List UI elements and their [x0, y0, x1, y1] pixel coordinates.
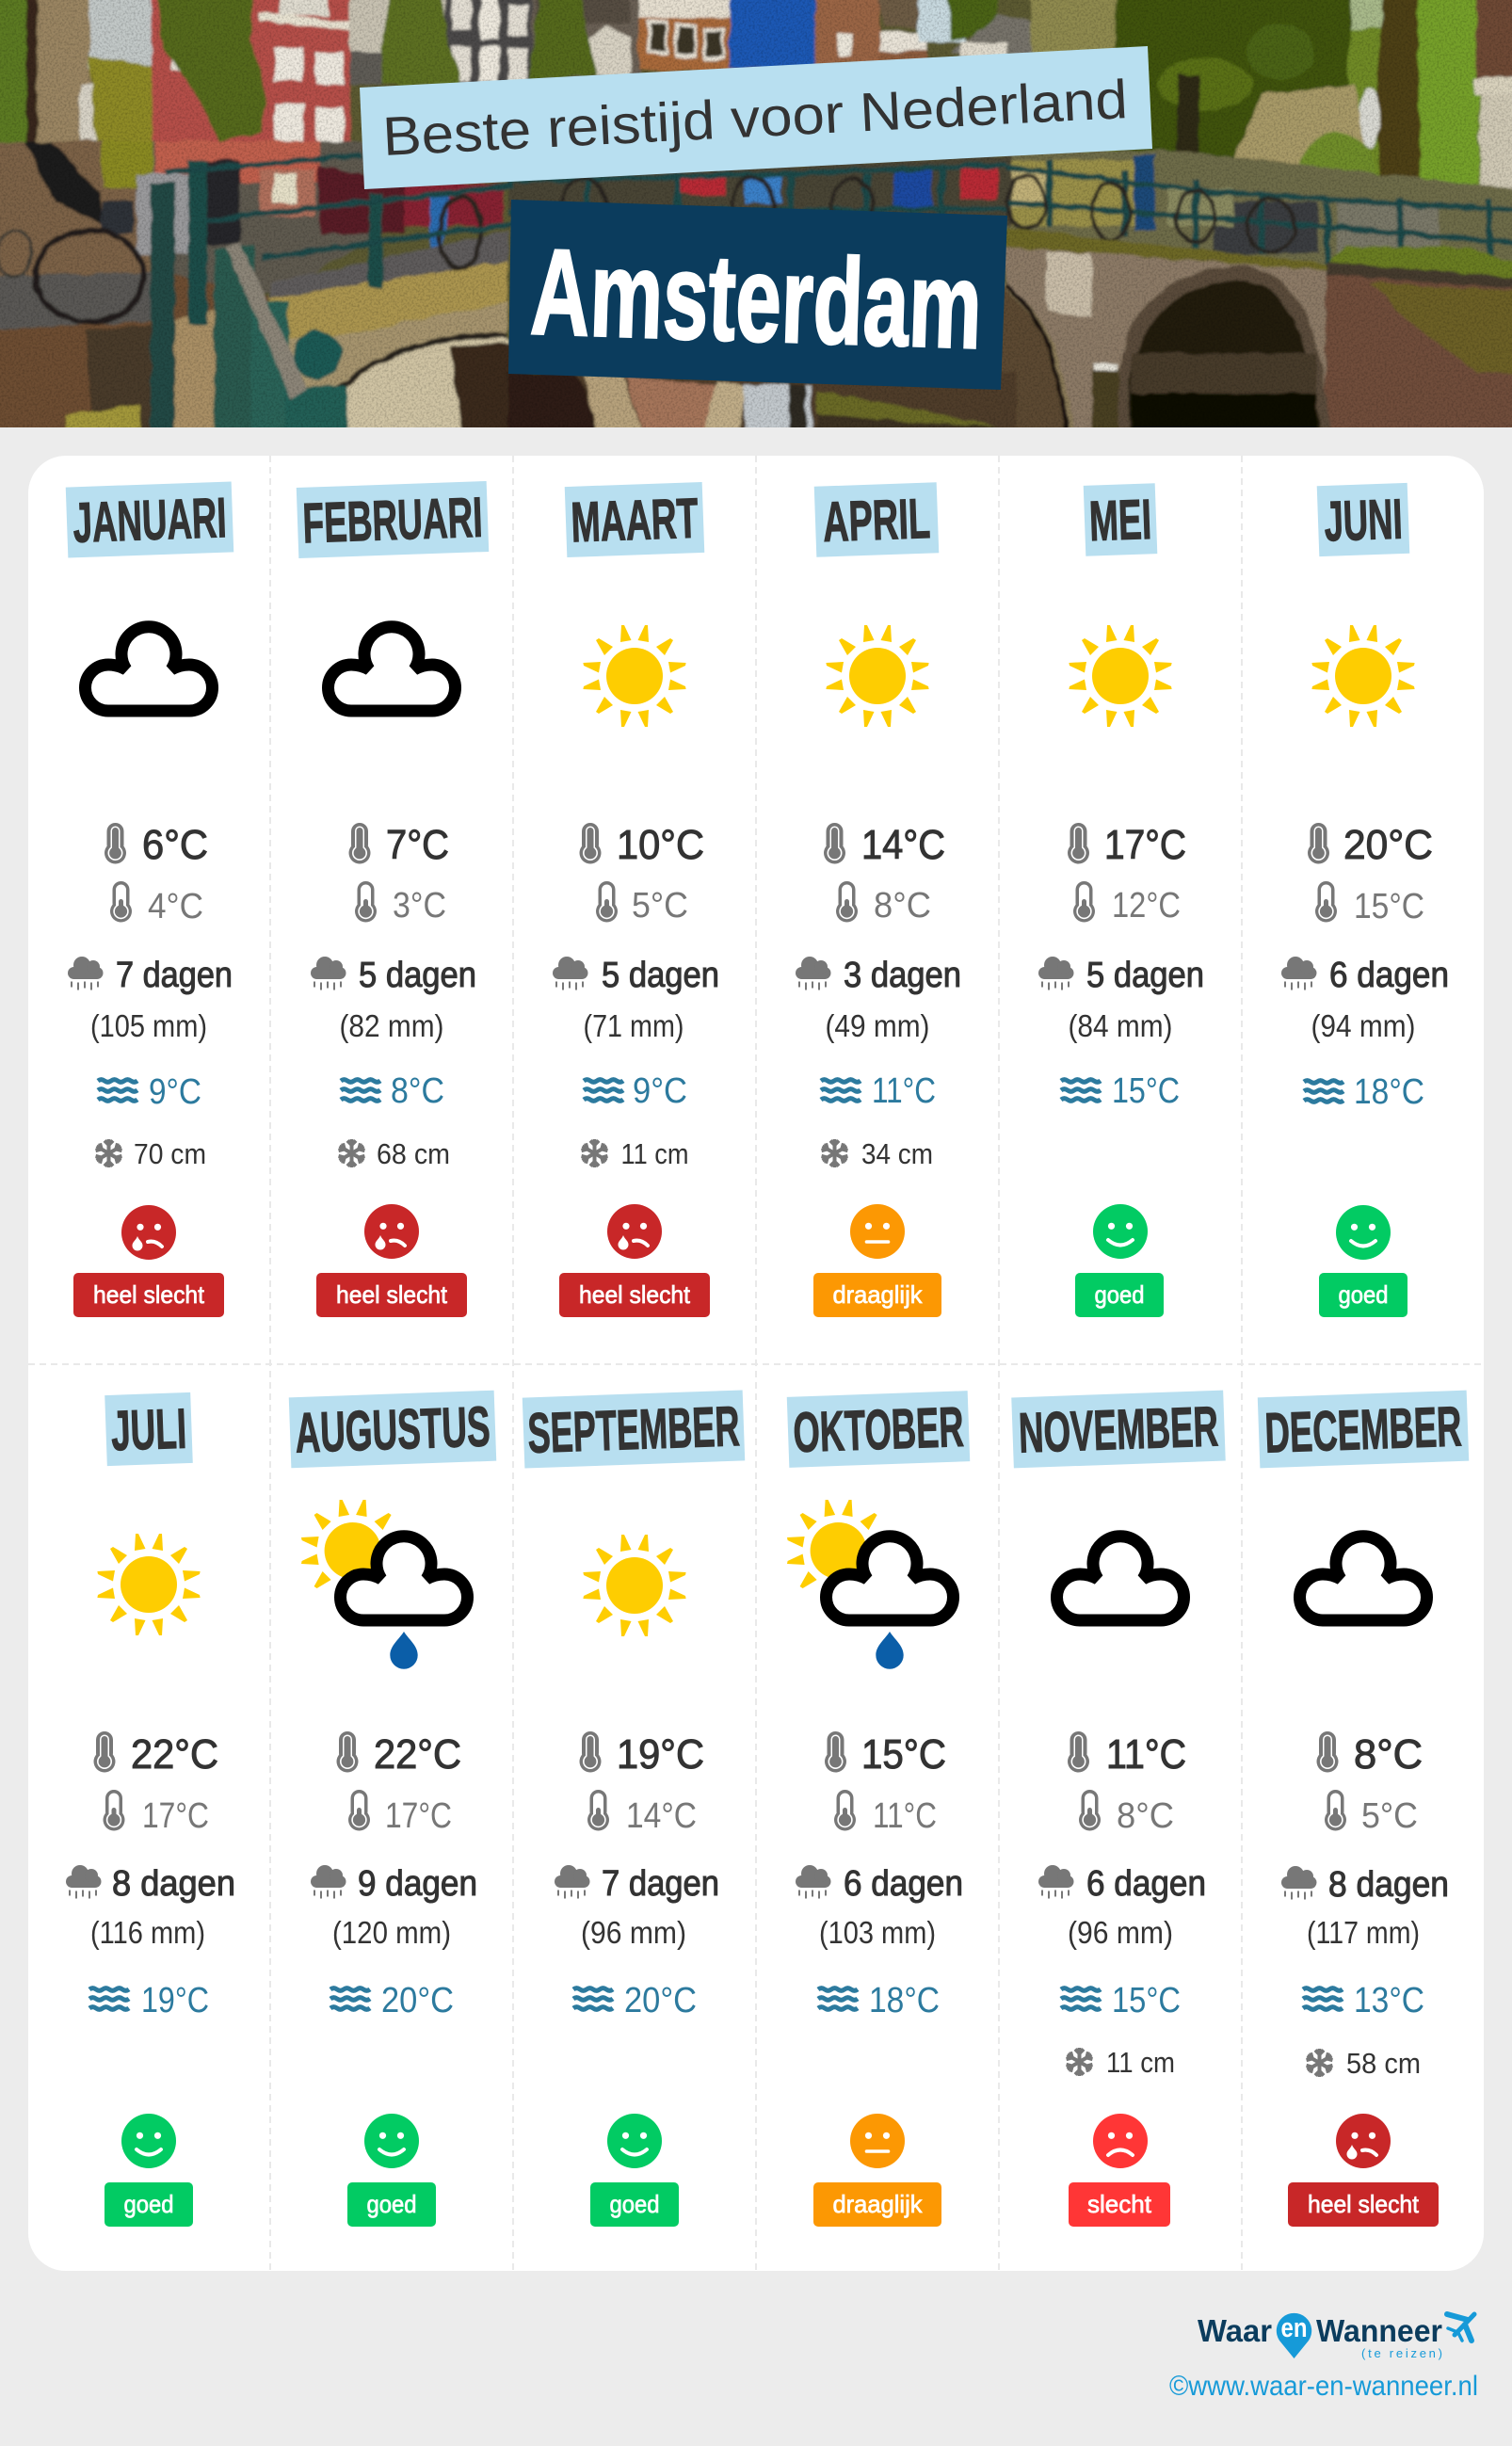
icon: water	[98, 1080, 137, 1101]
logo: Waar en Wanneer: Wanneer	[1316, 2313, 1442, 2348]
max temperature: 8°C	[1354, 1731, 1423, 1778]
month label	[1084, 483, 1157, 556]
max temperature: 15°C	[861, 1731, 946, 1778]
rating badge: goed	[1094, 1280, 1145, 1309]
min temperature: 12°C	[1112, 886, 1181, 925]
icon: snow	[94, 1139, 123, 1167]
rating badge	[347, 2182, 436, 2227]
icon: rain	[796, 1865, 830, 1898]
icon: min thermometer	[1079, 1790, 1101, 1830]
rating badge: heel slecht	[579, 1280, 691, 1309]
max temperature: 22°C	[374, 1731, 461, 1778]
rating badge: draaglijk	[832, 2190, 923, 2218]
icon: rating face	[1093, 1204, 1148, 1259]
rainfall: (82 mm)	[339, 1008, 444, 1043]
icon: cloud	[1056, 1537, 1184, 1620]
panel: april	[796, 482, 961, 1317]
rating badge	[1075, 1273, 1164, 1317]
icon: water	[330, 1988, 370, 2009]
icon: max thermometer	[94, 1731, 115, 1772]
month label: SEPTEMBER	[526, 1394, 741, 1465]
icon: max thermometer	[1068, 823, 1089, 864]
title banner	[508, 200, 1007, 390]
photo grain	[0, 0, 1512, 427]
icon: max thermometer	[580, 1731, 601, 1772]
month label	[523, 1390, 745, 1469]
month label	[105, 1392, 193, 1466]
rain days: 6 dagen	[1086, 1864, 1206, 1904]
month label	[1011, 1391, 1226, 1468]
rating badge	[813, 1273, 941, 1317]
panel: month grid card	[28, 456, 1484, 2271]
icon: sun	[97, 1534, 201, 1635]
subtitle text: Beste reistijd voor Nederland	[381, 69, 1129, 168]
icon: min thermometer	[348, 1790, 370, 1830]
max temperature: 6°C	[142, 822, 208, 868]
icon: min thermometer	[836, 881, 858, 923]
snow depth: 58 cm	[1346, 2047, 1421, 2080]
max temperature: 17°C	[1104, 822, 1186, 868]
water temperature: 18°C	[869, 1981, 940, 2020]
max temperature: 20°C	[1343, 822, 1433, 868]
water temperature: 9°C	[149, 1072, 201, 1112]
rating badge	[105, 2182, 193, 2227]
rating badge: slecht	[1087, 2190, 1152, 2218]
month label	[289, 1391, 496, 1468]
icon: max thermometer	[825, 1731, 846, 1772]
rainfall: (71 mm)	[584, 1008, 684, 1043]
rating badge: heel slecht	[93, 1280, 205, 1309]
icon: rain	[1281, 957, 1316, 990]
icon: rating face	[607, 1204, 662, 1259]
icon: cloud	[85, 627, 213, 711]
panel: januari	[66, 481, 233, 1317]
icon: rating face	[1093, 2114, 1148, 2168]
panel: juni	[1281, 483, 1449, 1317]
icon: water	[818, 1988, 858, 2009]
icon: airplane	[1447, 2314, 1474, 2341]
icon: max thermometer	[348, 823, 371, 864]
icon: min thermometer	[587, 1790, 609, 1830]
max temperature: 14°C	[861, 822, 945, 868]
rain days: 7 dagen	[602, 1864, 719, 1904]
snow depth: 11 cm	[1106, 2046, 1175, 2079]
icon: water	[573, 1988, 613, 2009]
icon: water	[1061, 1080, 1101, 1101]
icon: snow	[820, 1139, 849, 1167]
icon: min thermometer	[1325, 1790, 1346, 1830]
rainfall: (49 mm)	[825, 1008, 930, 1043]
min temperature: 8°C	[1117, 1796, 1174, 1836]
min temperature: 11°C	[873, 1796, 937, 1836]
month label	[1317, 483, 1409, 556]
water temperature: 18°C	[1354, 1072, 1424, 1112]
snow depth: 68 cm	[377, 1137, 450, 1170]
icon: water	[341, 1080, 380, 1101]
rating badge	[316, 1273, 467, 1317]
rain days: 3 dagen	[844, 956, 961, 995]
water temperature: 20°C	[381, 1981, 454, 2020]
icon: sun	[1311, 625, 1415, 727]
water temperature: 15°C	[1112, 1071, 1180, 1111]
min temperature: 17°C	[385, 1796, 452, 1836]
min temperature: 5°C	[632, 886, 688, 925]
icon: min thermometer	[1315, 881, 1337, 923]
icon: rating face	[850, 2114, 905, 2168]
month label: NOVEMBER	[1018, 1394, 1219, 1465]
rating badge: goed	[367, 2190, 416, 2218]
water temperature: 11°C	[872, 1071, 936, 1111]
icon: rain	[68, 957, 104, 990]
icon: snow	[337, 1139, 366, 1167]
rain days: 5 dagen	[1086, 956, 1204, 995]
icon: rain	[1038, 1865, 1073, 1898]
icon: max thermometer	[1308, 823, 1329, 864]
min temperature: 15°C	[1354, 887, 1424, 926]
max temperature: 19°C	[617, 1731, 704, 1778]
panel: oktober	[787, 1391, 970, 2227]
icon: rain	[796, 957, 830, 990]
icon: rain	[1281, 1866, 1316, 1900]
icon: sun	[583, 1535, 686, 1636]
rainfall: (84 mm)	[1068, 1008, 1173, 1043]
rain days: 5 dagen	[602, 956, 719, 995]
subtitle banner	[360, 46, 1152, 189]
icon: min thermometer	[110, 881, 132, 923]
month label: MAART	[570, 487, 700, 554]
rating badge: goed	[610, 2190, 659, 2218]
icon: rating face	[1336, 1205, 1391, 1260]
snow depth: 70 cm	[134, 1137, 206, 1170]
month label	[565, 482, 704, 557]
icon: cloud	[328, 627, 456, 711]
icon: max thermometer	[105, 823, 126, 864]
icon: min thermometer	[834, 1790, 856, 1830]
rating badge: goed	[1339, 1280, 1388, 1309]
icon: rain	[553, 957, 587, 990]
icon: snow	[580, 1139, 609, 1167]
month label	[787, 1391, 970, 1468]
month label	[297, 481, 489, 558]
rain days: 9 dagen	[358, 1864, 477, 1904]
rating badge	[1288, 2182, 1439, 2227]
icon: water	[1303, 1988, 1343, 2009]
rating badge: goed	[124, 2190, 173, 2218]
icon: max thermometer	[824, 823, 845, 864]
icon: rain	[66, 1865, 102, 1898]
month label: MEI	[1088, 488, 1152, 553]
icon: sun	[583, 625, 686, 727]
rain days: 8 dagen	[1328, 1865, 1449, 1905]
month label	[814, 482, 939, 557]
min temperature: 8°C	[874, 886, 931, 925]
rainfall: (94 mm)	[1311, 1008, 1416, 1043]
icon: max thermometer	[337, 1731, 358, 1772]
icon: max thermometer	[1316, 1731, 1339, 1772]
min temperature: 3°C	[393, 886, 446, 925]
icon: rain	[311, 1865, 346, 1898]
panel: augustus	[289, 1391, 496, 2227]
logo: Waar en Wanneer	[1198, 2313, 1474, 2360]
logo: Waar en Wanneer: (te reizen)	[1361, 2346, 1442, 2360]
icon: rating face	[364, 1204, 419, 1259]
icon: sun	[1069, 625, 1172, 727]
logo pin	[1277, 2313, 1311, 2358]
icon: sun behind rain cloud	[787, 1500, 953, 1669]
panel: november	[1011, 1391, 1226, 2227]
max temperature: 22°C	[131, 1731, 218, 1778]
icon: min thermometer	[1073, 881, 1095, 923]
min temperature: 14°C	[626, 1796, 697, 1836]
rating badge	[73, 1273, 224, 1317]
rainfall: (96 mm)	[581, 1915, 686, 1950]
rating badge	[1319, 1273, 1407, 1317]
icon: min thermometer	[355, 881, 377, 923]
rainfall: (120 mm)	[332, 1915, 451, 1950]
logo: Waar en Wanneer: en	[1280, 2313, 1307, 2343]
icon: rain	[1038, 957, 1073, 990]
icon: rain	[555, 1865, 589, 1898]
icon: water	[584, 1080, 623, 1101]
month label: JANUARI	[72, 486, 228, 555]
icon: max thermometer	[1068, 1731, 1089, 1772]
icon: rating face	[121, 2114, 176, 2168]
icon: water	[1061, 1988, 1101, 2009]
icon: min thermometer	[596, 881, 618, 923]
icon: rating face	[1336, 2114, 1391, 2168]
title text: Amsterdam	[529, 222, 984, 375]
rating badge	[813, 2182, 941, 2227]
water temperature: 19°C	[141, 1981, 209, 2020]
rain days: 5 dagen	[359, 956, 476, 995]
icon: rating face	[121, 1205, 176, 1260]
snow depth: 34 cm	[861, 1137, 933, 1170]
icon: sun behind rain cloud	[301, 1500, 467, 1669]
icon: rain	[311, 957, 346, 990]
rain days: 6 dagen	[844, 1864, 963, 1904]
min temperature: 17°C	[142, 1796, 209, 1836]
rainfall: (116 mm)	[90, 1915, 205, 1950]
water temperature: 8°C	[391, 1071, 444, 1111]
rainfall: (105 mm)	[90, 1008, 207, 1043]
header photo: Amsterdam canal bridge	[0, 0, 1512, 461]
panel: juli	[66, 1392, 235, 2227]
rating badge: draaglijk	[832, 1280, 923, 1309]
month label: APRIL	[822, 487, 931, 554]
rating badge	[590, 2182, 679, 2227]
icon: rating face	[607, 2114, 662, 2168]
panel: september	[523, 1390, 745, 2227]
water temperature: 9°C	[633, 1071, 687, 1111]
month label: FEBRUARI	[301, 486, 484, 555]
logo: Waar en Wanneer: Waar	[1198, 2313, 1272, 2348]
panel: december	[1258, 1391, 1469, 2227]
icon: rating face	[850, 1204, 905, 1259]
rainfall: (96 mm)	[1068, 1915, 1173, 1950]
rating badge	[559, 1273, 710, 1317]
rainfall: (117 mm)	[1307, 1915, 1420, 1950]
panel: maart	[553, 482, 719, 1317]
rain days: 7 dagen	[116, 956, 233, 995]
snow depth: 11 cm	[621, 1137, 689, 1170]
icon: water	[1304, 1081, 1343, 1102]
source url: ©www.waar-en-wanneer.nl	[1169, 2371, 1478, 2402]
icon: sun	[826, 625, 929, 727]
icon: min thermometer	[104, 1790, 124, 1830]
month label: JUNI	[1323, 488, 1404, 553]
panel: mei	[1038, 483, 1204, 1317]
min temperature: 4°C	[148, 887, 203, 926]
month label: OKTOBER	[792, 1395, 965, 1464]
rating badge	[1069, 2182, 1170, 2227]
min temperature: 5°C	[1361, 1796, 1418, 1836]
rainfall: (103 mm)	[819, 1915, 936, 1950]
rain days: 8 dagen	[112, 1864, 235, 1904]
rain days: 6 dagen	[1329, 956, 1449, 995]
icon: water	[89, 1988, 129, 2009]
water temperature: 13°C	[1354, 1981, 1424, 2020]
icon: cloud	[1299, 1537, 1427, 1620]
month label: JULI	[110, 1397, 187, 1462]
max temperature: 11°C	[1106, 1731, 1186, 1778]
month label	[66, 481, 233, 558]
max temperature: 10°C	[617, 822, 704, 868]
rating badge: heel slecht	[1308, 2190, 1420, 2218]
rating badge: heel slecht	[336, 1280, 448, 1309]
water temperature: 15°C	[1112, 1981, 1181, 2020]
panel: februari	[297, 481, 489, 1317]
icon: water	[821, 1080, 861, 1101]
water temperature: 20°C	[624, 1981, 697, 2020]
month label: AUGUSTUS	[294, 1394, 491, 1465]
max temperature: 7°C	[386, 822, 449, 868]
icon: max thermometer	[580, 823, 601, 864]
icon: rating face	[364, 2114, 419, 2168]
icon: snow	[1065, 2048, 1094, 2076]
icon: snow	[1305, 2049, 1334, 2077]
